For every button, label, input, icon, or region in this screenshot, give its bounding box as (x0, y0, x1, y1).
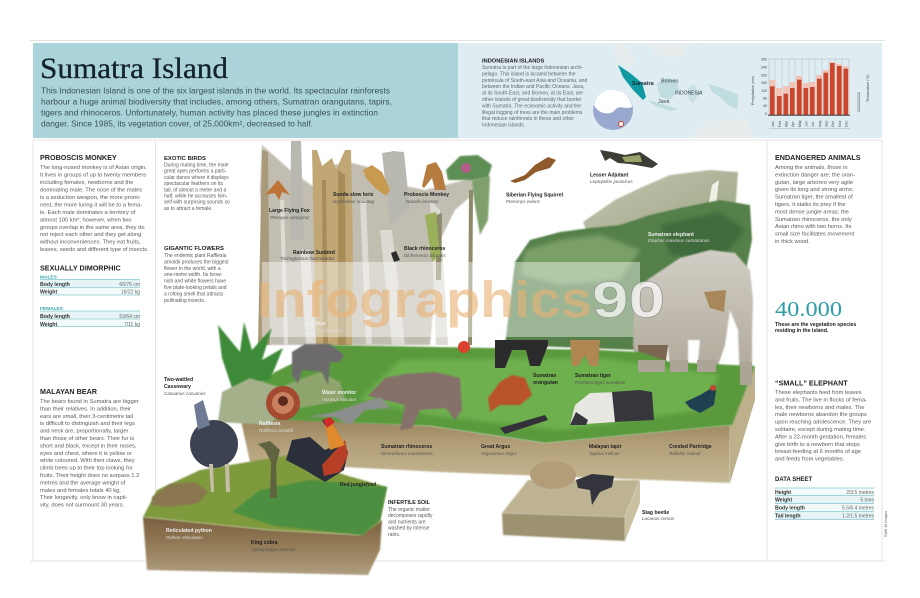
text: exotic birds: half, while he accouses him- (164, 194, 228, 200)
map labels (632, 78, 703, 105)
text: Malayan bear: than their relatives. In addition, their (40, 406, 131, 412)
label: orangutan (533, 373, 558, 386)
text: proboscis monkey: le. Each male dominates a territory of (40, 210, 136, 216)
Sumatran rhinoceros (368, 372, 462, 430)
text: endangered animals: ENDANGERED ANIMALS (775, 153, 861, 162)
text: endangered animals (775, 153, 861, 245)
month labels: Jan (771, 121, 775, 127)
text: endangered animals: most dense jungle areas; the (775, 209, 849, 215)
label: siberian flying squirrel (506, 192, 564, 204)
chart axis labels: 80 (763, 96, 767, 100)
mountain (583, 170, 738, 245)
chart axis labels: 200 (761, 74, 767, 78)
callout: 40.000 species: residing in the island. (775, 328, 829, 334)
month labels: Jul (811, 122, 815, 127)
chart axis labels (761, 58, 767, 116)
callout: 40.000 species: These are the vegetation species (775, 322, 856, 328)
label: sumatran rhinoceros (381, 444, 434, 456)
text: small elephant: After a 22-month gestation, females (775, 434, 866, 440)
text: Malayan bear: and neck are, proportionally, larger (40, 429, 129, 435)
text: proboscis monkey: groups overlap in the same area, they do (40, 225, 145, 231)
text: gigantic flowers: arnoldii produces the biggest (164, 259, 229, 265)
tapir (570, 390, 654, 425)
text: small elephant: give birth to a newborn that stops (775, 442, 860, 448)
data table: elephant data sheet: DATA SHEET (775, 477, 813, 483)
text: proboscis monkey (39, 153, 149, 253)
globe locator (593, 90, 633, 130)
label: rafflesia (259, 421, 294, 433)
text: Malayan bear: short and black, except in their noses, (40, 443, 137, 449)
label: sunda slow loris: Nycticebus coucang (333, 199, 375, 204)
text: Indonesian islands: other islands of great biodiversity that border (482, 97, 582, 103)
text: exotic birds: tail, of almost a metre and a (164, 187, 226, 193)
data table: sexually dimorphic: Body length (40, 282, 70, 288)
chart axis labels: 240 (761, 66, 767, 70)
text: small elephant: male newborns abandon the groups (775, 412, 867, 418)
text: endangered animals: Among the animals, those in (775, 165, 848, 171)
data table: sexually dimorphic: Weight (40, 290, 57, 296)
text: Malayan bear: Their longevity, only know in capti- (40, 495, 128, 501)
label: rafflesia: Rafflesia arnoldii (259, 428, 294, 433)
month labels: May (798, 120, 802, 127)
text: Malayan bear: The bears found in Sumatra are bigger (40, 399, 139, 405)
label: cassowary (164, 377, 206, 396)
liana (436, 190, 473, 345)
text: proboscis monkey: leaves, seeds and different type of insects. (40, 247, 149, 253)
text: infertile soil: decomposes rapidly (388, 513, 433, 519)
label: great argus (480, 444, 517, 456)
label: malayan bear: Helarctos malayanus (300, 328, 344, 333)
black rhinoceros hornbill (391, 251, 400, 262)
python (152, 482, 208, 507)
label: lesser adjutant: Lesser Adjutant (590, 172, 629, 178)
watermark: Infographics (257, 271, 592, 328)
elephant legs front (638, 360, 752, 385)
text: small elephant: and fruits. The live in flocks of fema- (775, 397, 867, 403)
cassowary (190, 400, 238, 492)
king cobra (258, 441, 280, 498)
label: crested partridge (669, 444, 712, 456)
label: stag beetle: Lucanus cervus (642, 516, 675, 521)
callout: 40.000 species: 40.000 (775, 297, 842, 321)
heading: Indonesian islands: INDONESIAN ISLANDS (482, 58, 544, 64)
label: water monitor: Varanus salvator (322, 397, 357, 402)
label: stag beetle (642, 510, 675, 521)
watermark: 90 (592, 271, 665, 328)
watermark veil background (262, 262, 640, 337)
text: small elephant: les, their newborns and males. The (775, 405, 864, 411)
text: endangered animals: given its long and strong arms; (775, 187, 854, 193)
Malayan bear (495, 340, 548, 368)
chart axis labels: 280 (761, 58, 767, 62)
label: black hornbill (404, 246, 446, 258)
fern plant (218, 322, 283, 388)
label: reticulated python: Python reticulatus (166, 535, 203, 540)
text: gigantic flowers: a rotting smell that attracts (164, 291, 224, 297)
label: tiger: Panthera tigris sumatrae (575, 380, 625, 385)
great argus tail (500, 415, 548, 434)
text: exotic birds: During mating time, the male (164, 162, 229, 168)
text: small elephant: solitaire, except during mating time. (775, 427, 866, 433)
intro text: tigers and rhinoceros. Unfortunately, human activity has placed these jungles in extinction (41, 108, 378, 118)
label: stag beetle: Stag beetle (642, 510, 669, 516)
label: siberian flying squirrel: Pteromys volans (506, 199, 541, 204)
data table: elephant data sheet: Height (775, 490, 791, 496)
intro text: harbour a huge animal biodiversity that includes, among others, Sumatran orangutans, tapirs, (41, 98, 392, 106)
intro text: danger. Since 1985, its vegetation cover, of 25,000km², decreased to half. (41, 120, 313, 128)
flying fox (265, 180, 290, 200)
text: endangered animals: Sumatran tiger, the smallest of (775, 195, 853, 201)
text: endangered animals: Asian rhino with two horns. Its (775, 224, 852, 230)
text: proboscis monkey: PROBOSCIS MONKEY (40, 153, 117, 162)
text: exotic birds: EXOTIC BIRDS (164, 156, 206, 162)
forest (505, 200, 752, 350)
text: endangered animals: extinction danger are: the oran- (775, 172, 855, 178)
orangutan (488, 375, 532, 412)
chart axis labels: 0 (765, 112, 767, 116)
data table: sexually dimorphic: Weight (40, 322, 57, 328)
text: proboscis monkey: not reject each other and they get along (40, 232, 141, 238)
text: Malayan bear: white coloured. With their claws, they (39, 458, 135, 464)
ground cover (232, 480, 387, 535)
data table: sexually dimorphic (40, 264, 140, 328)
text: exotic birds: cular dance where it displays (164, 175, 229, 181)
month labels: Dec (844, 120, 848, 127)
text: small elephant: These elephants feed from leaves (775, 390, 862, 396)
data table: sexually dimorphic: SEXUALLY DIMORPHIC (40, 264, 121, 272)
month labels: Nov (838, 120, 842, 127)
text: Indonesian islands: illegal logging of trees are the main problems (482, 110, 583, 116)
month labels: Aug (818, 121, 822, 127)
data table: sexually dimorphic: FEMALES (40, 306, 64, 312)
label: black hornbill: Black rhinoceros (404, 246, 445, 252)
header panel: introduction (33, 43, 458, 138)
label: black hornbill: Dicherceros bicornis (404, 253, 446, 258)
precipitation bars (770, 63, 848, 115)
text: Malayan bear: than those of other bears. Their fur is (40, 436, 134, 442)
label: cassowary: Cassowary (164, 384, 191, 390)
data table: elephant data sheet (775, 477, 874, 520)
label: crested partridge: Rollulus rouloul (669, 451, 701, 456)
label: malayan bear: Sun bear (304, 321, 326, 327)
callout: 40.000 species (775, 297, 858, 334)
label: lesser adjutant (590, 172, 633, 184)
slow loris (363, 165, 390, 196)
text: endangered animals: gutan, large arboreo very agile (775, 180, 853, 186)
text: proboscis monkey: including females, newborns and the (40, 180, 133, 186)
label: tiger (575, 373, 625, 385)
flying squirrel (510, 157, 556, 183)
label: water monitor: Water monitor (322, 390, 356, 396)
title: Sumatra Island (40, 53, 228, 85)
text: Malayan bear: fruits. Their height does no surpass 1.2 (40, 473, 139, 479)
label: malayan tapir: Tapirus indicus (589, 451, 620, 456)
data table: sexually dimorphic: 16/22 kg (121, 290, 140, 296)
intro text: This Indonesian Island is one of the six largest islands in the world. Its spectacular rainforests (41, 86, 390, 96)
data table: elephant data sheet: 5.5/6.4 metres (842, 506, 874, 512)
text: endangered animals: tigers, it stalks its prey if the (775, 202, 846, 208)
label: lesser adjutant: Leptoptilos javanicus (590, 179, 633, 184)
month labels (771, 120, 848, 127)
label: proboscis monkey: Nasalis larvatus (406, 199, 439, 204)
label: crested partridge: Crested Partridge (669, 444, 712, 450)
label: sunda slow loris: Sunda slow loris (333, 192, 374, 198)
text: exotic birds: great apes performs a parti- (164, 169, 227, 175)
text: proboscis monkey: is a seduction weapon, the more promi- (40, 195, 141, 201)
text: infertile soil: The organic matter (388, 507, 430, 513)
label: malayan bear (300, 321, 344, 333)
grass clump (218, 378, 292, 425)
text: gigantic flowers: five plate-looking petals and (164, 285, 227, 291)
rafflesia (266, 386, 300, 420)
climate chart: Precipitation (mm) (751, 76, 755, 105)
lower left block ground (143, 455, 387, 535)
text: Indonesian islands: Sumatra is part of the large Indonesian archi- (482, 65, 583, 71)
text: infertile soil (388, 500, 434, 538)
crested partridge (685, 388, 716, 413)
text: exotic birds: self with surprising sounds so (164, 200, 230, 206)
red flower (458, 341, 470, 353)
text: exotic birds (164, 156, 231, 212)
month labels: Feb (778, 121, 782, 127)
text: proboscis monkey: dominating male. The nose of the males (40, 187, 142, 193)
text: small elephant: upon reaching adolescence. They are (775, 420, 871, 426)
label: cassowary: Two-wattled (164, 377, 193, 383)
text: proboscis monkey: It lives in groups of up to twenty members (40, 172, 146, 178)
text: small elephant: breast-feeding at 6 months of age (775, 449, 861, 455)
text: endangered animals: in thick wood. (775, 239, 810, 245)
text: Malayan bear: is difficult to distinguish and their legs (40, 421, 135, 427)
upper block soil (240, 416, 730, 483)
text: proboscis monkey: almost 100 km²; however, when two (40, 217, 131, 223)
text: gigantic flowers: nish and white flowers have (164, 279, 226, 285)
text: Indonesian islands: peninsula of South-east Asia and Oceania, and (482, 78, 587, 84)
text: endangered animals: Sumatran rhinoceros, the only (775, 217, 852, 223)
chart axis labels: 160 (761, 81, 767, 85)
climate chart: Temperature (°C) (866, 74, 870, 102)
text: infertile soil: washed by intense (388, 526, 430, 532)
label: large flying fox: Large Flying Fox (269, 208, 310, 214)
text: Malayan bear: eyes and chest, where it is yellow or (40, 451, 132, 457)
data table: elephant data sheet: 2/3.5 metres (846, 490, 874, 496)
chart axis labels: 120 (761, 89, 767, 93)
month labels: Sep (824, 121, 828, 127)
label: siberian flying squirrel: Siberian Flying Squirrel (506, 192, 564, 198)
data table: elephant data sheet: 1.2/1.5 metres (842, 514, 874, 520)
label: sumatran elephant: Sumatran elephant (648, 232, 694, 238)
label: sumatran rhinoceros: Sumatran rhinoceros (381, 444, 432, 450)
month labels: Mar (784, 120, 788, 127)
waterfall (708, 180, 719, 208)
text: Indonesian islands: at its South-East, and Borneo, at its East, are (482, 91, 583, 97)
chart axis labels: 40 (763, 104, 767, 108)
text: Indonesian islands: Indonesian islands. (482, 123, 525, 129)
data table: sexually dimorphic: 66/76 cm (119, 282, 140, 288)
label: reticulated python (166, 528, 212, 540)
label: king cobra: King cobra (251, 540, 278, 546)
label: sumatran elephant (648, 232, 710, 243)
label: sunda slow loris (333, 192, 375, 204)
text: proboscis monkey: The long-nosed monkey is of Asian origin. (40, 165, 147, 171)
text: Malayan bear: males and females totals 40 kg. (40, 488, 121, 494)
text: Malayan bear: vity, does not surmount 30 years. (40, 503, 125, 509)
label: king cobra: Ophiophagus hannah (251, 547, 295, 552)
text: Indonesian islands: between the Indian and Pacific Oceans. Java, (482, 84, 584, 90)
label: cassowary: Casuarius casuarius (164, 391, 206, 396)
label: rhinoceros hornbill: Trichoglossus haematodus (280, 256, 335, 261)
label: malayan tapir (589, 444, 622, 456)
lower left block soil (143, 517, 382, 575)
text: Malayan bear: ears are small, their 3-centimetre tail (40, 414, 133, 420)
hanging foliage (446, 155, 492, 180)
data table: sexually dimorphic: 53/64 cm (119, 314, 140, 320)
text: infertile soil: rains. (388, 532, 400, 538)
map labels: Sumatra (632, 81, 655, 87)
proboscis monkey (422, 162, 446, 190)
label: orangutan: Sumatran (533, 373, 556, 379)
text: Malayan bear: MALAYAN BEAR (40, 387, 98, 396)
species labels (164, 172, 712, 552)
month labels: Apr (791, 121, 795, 127)
text: Malayan bear: climb trees up to their top looking for (40, 466, 133, 472)
rooster (286, 417, 348, 482)
label: sumatran elephant: Elephas maximus sumatranus (648, 238, 710, 243)
month labels: Oct (831, 121, 835, 127)
water monitor (307, 397, 390, 425)
text: gigantic flowers: pollinating insects. (164, 298, 205, 304)
text: gigantic flowers: flower in the world, with a (164, 266, 221, 272)
label: great argus: Great Argus (481, 444, 510, 450)
bearded pig (292, 344, 344, 385)
data table: elephant data sheet: Tail length (775, 514, 801, 520)
label: rhinoceros hornbill: Rainbow Sunbird (293, 250, 335, 256)
climate chart (751, 58, 870, 128)
label: red junglefowl: Red junglefowl (340, 482, 377, 488)
data table: elephant data sheet: Weight (775, 498, 792, 504)
text: gigantic flowers: one-metre width. Its brow- (164, 272, 223, 278)
text: exotic birds: as to attract a female. (164, 206, 213, 212)
label: water monitor (322, 390, 357, 402)
text: exotic birds: spectacular feathers on its (164, 181, 223, 187)
header panel: Indonesian islands (458, 43, 882, 138)
label: tiger: Sumatran tiger (575, 373, 611, 379)
text: small elephant: “SMALL” ELEPHANT (775, 378, 848, 388)
Sumatra highlighted (618, 65, 646, 100)
text: small elephant: and feeds from vegetables. (775, 457, 845, 463)
illustration: rainforest diorama (143, 141, 755, 575)
text: gigantic flowers: GIGANTIC FLOWERS (164, 246, 224, 252)
label: rafflesia: Rafflesia (259, 421, 280, 427)
data table: sexually dimorphic: MALES (40, 274, 58, 280)
label: king cobra (251, 540, 295, 552)
map labels: Java (658, 99, 669, 105)
text: proboscis monkey: without inconveniences. They eat fruits, (39, 240, 141, 246)
data table: elephant data sheet: 5 tons (860, 498, 874, 504)
image credit: ©AW 16 Images (884, 511, 888, 537)
label: reticulated python: Reticulated python (166, 528, 212, 534)
map labels: Borneo (661, 78, 678, 84)
text: gigantic flowers: The endemic plant Rafflesia (164, 253, 227, 259)
text: Indonesian islands: pelago. This island is located between the (482, 71, 576, 77)
label: orangutan: orangutan (533, 380, 558, 386)
label: great argus: Argusianus argus (480, 451, 517, 456)
lesser adjutant (600, 150, 658, 168)
text: Malayan bear: metres and the average weight of (40, 480, 126, 486)
text: infertile soil: INFERTILE SOIL (388, 500, 431, 506)
data table: elephant data sheet: Body length (775, 506, 805, 512)
month labels: Jun (804, 121, 808, 127)
giant tree (258, 141, 492, 345)
text: Malayan bear (39, 387, 141, 509)
text: Indonesian islands: that reduce rainforests in these and other (482, 116, 574, 122)
text: endangered animals: small size facilitates movement (775, 232, 855, 238)
label: malayan tapir: Malayan tapir (589, 444, 622, 450)
map of Indonesia (593, 44, 755, 138)
label: large flying fox: Pteropus vampyrus (270, 215, 310, 220)
Sumatran tiger (570, 340, 600, 366)
text: small elephant (775, 378, 873, 463)
text: proboscis monkey: nent, the more luring it will be to a fema- (40, 202, 142, 208)
data table: sexually dimorphic: 7/11 kg (124, 322, 140, 328)
label: sumatran rhinoceros: Dicerorhinus sumatrensis (381, 451, 434, 456)
label: proboscis monkey: Proboscis Monkey (404, 192, 449, 198)
data table: sexually dimorphic: Body length (40, 314, 70, 320)
text: Indonesian islands: with Sumatra. The economic activity and the (482, 103, 581, 109)
elephant (633, 250, 753, 385)
text: infertile soil: and nutrients are (388, 519, 426, 525)
text: gigantic flowers (164, 246, 230, 304)
stag beetle block (502, 461, 640, 541)
label: proboscis monkey (404, 192, 449, 204)
upper block ground (238, 345, 755, 443)
climate chart: 2222222222 (857, 92, 861, 112)
map labels: INDONESIA (675, 90, 703, 96)
temperature bars (770, 62, 849, 115)
label: large flying fox (269, 208, 310, 220)
label: rhinoceros hornbill (280, 250, 335, 261)
